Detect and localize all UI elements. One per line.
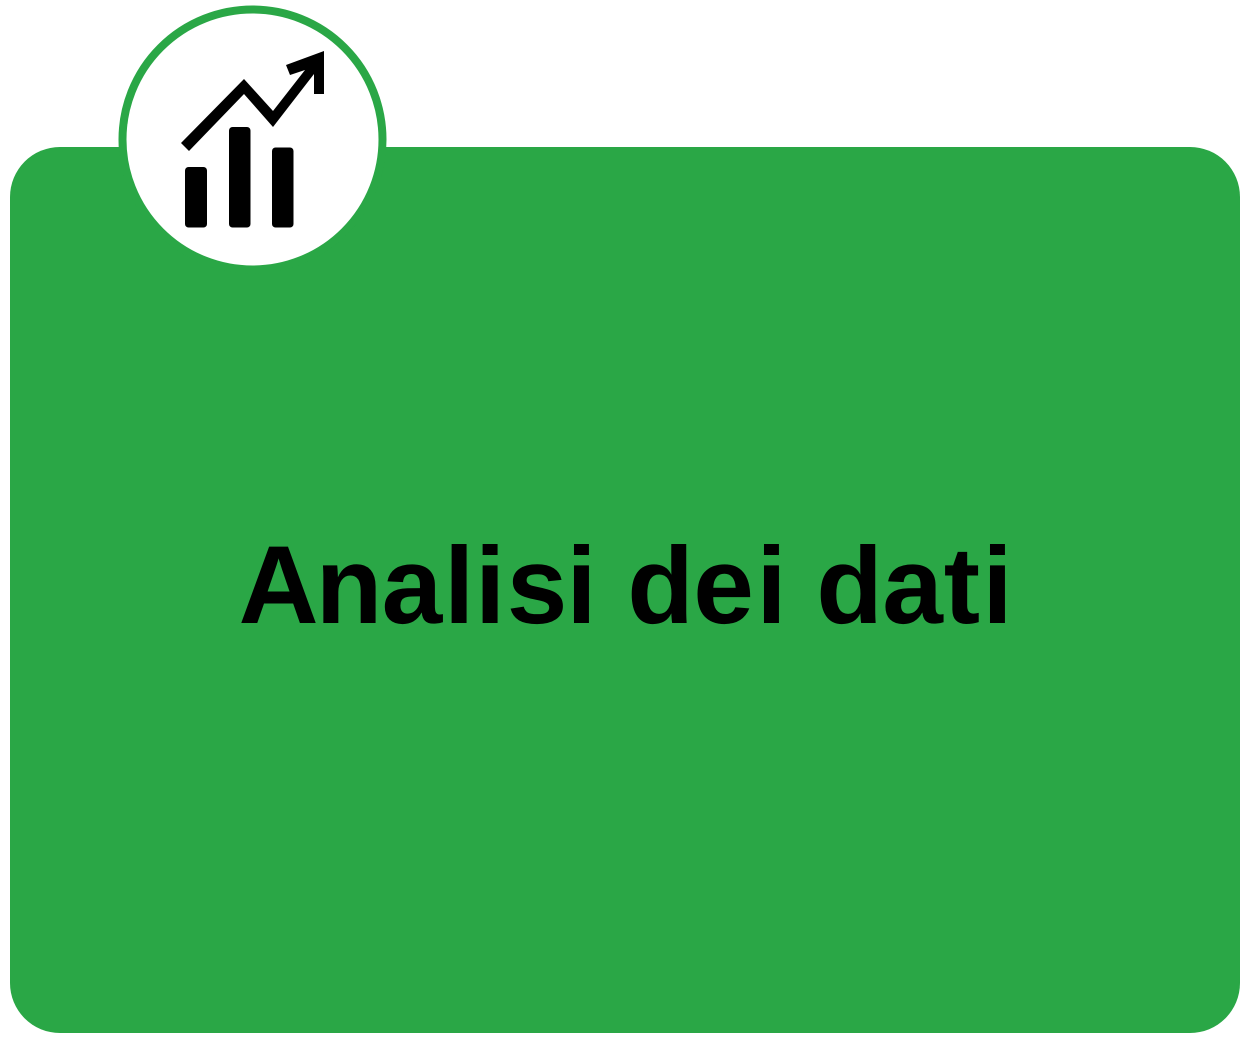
icon: trend arrow — [181, 51, 324, 151]
title: Analisi dei dati — [238, 523, 1013, 647]
badge circle — [122, 10, 382, 270]
icon badge: growth chart in circle — [122, 10, 382, 270]
icon: bars — [185, 127, 294, 228]
